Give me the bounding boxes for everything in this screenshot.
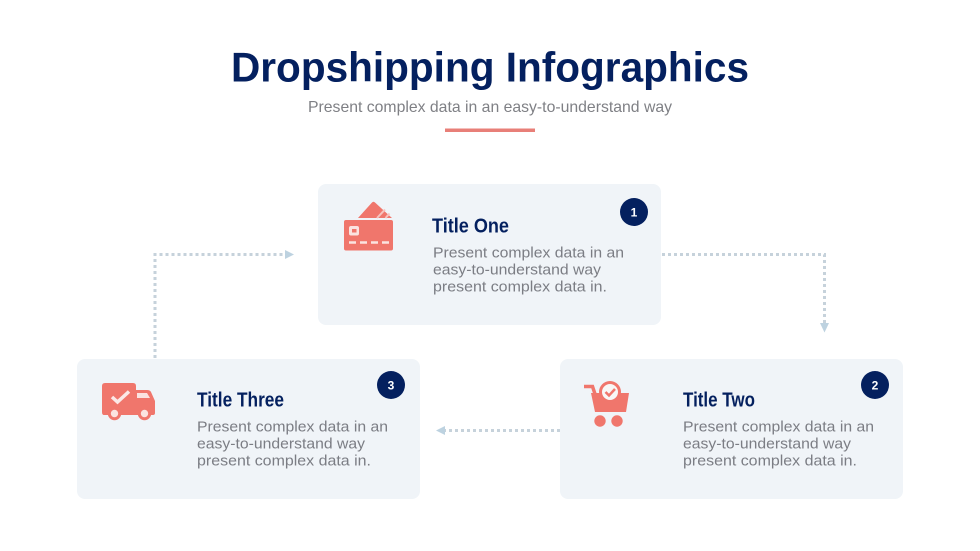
panel: title two [560,359,903,499]
text block: Present complex data in an [197,418,388,436]
number badge 2 [861,371,889,399]
arrow: step 1 to step 2 [662,254,829,332]
arrow: step 2 to step 3 [436,426,560,435]
text block: Present complex data in an [683,418,874,436]
text block [683,418,874,470]
subtitle: Present complex data in an easy-to-understand way [308,99,672,116]
title underline [445,128,535,132]
icon: delivery truck with check [102,383,155,420]
number badge 1 [620,198,648,226]
number badge 3 [377,371,405,399]
text block: present complex data in. [683,452,857,470]
number badge 1: 1 [631,206,638,220]
text block: Present complex data in an [433,244,624,262]
heading: Title Three [197,390,284,412]
icon: credit cards [344,202,393,250]
panel: title three [77,359,420,499]
text block: easy-to-understand way [197,436,366,452]
text block: present complex data in. [197,452,371,470]
heading: Title Two [683,390,755,412]
text block [433,244,624,296]
icon: shopping cart with check [584,381,629,427]
text block: present complex data in. [433,278,607,296]
text block [197,418,388,470]
heading: Title One [432,216,509,238]
panel: title one [318,184,661,325]
number badge 2: 2 [872,378,879,392]
text block: easy-to-understand way [683,436,852,452]
arrow: step 3 to step 1 [155,250,294,358]
number badge 3: 3 [388,378,395,392]
title: Dropshipping Infographics [231,44,749,90]
text block: easy-to-understand way [433,262,602,278]
